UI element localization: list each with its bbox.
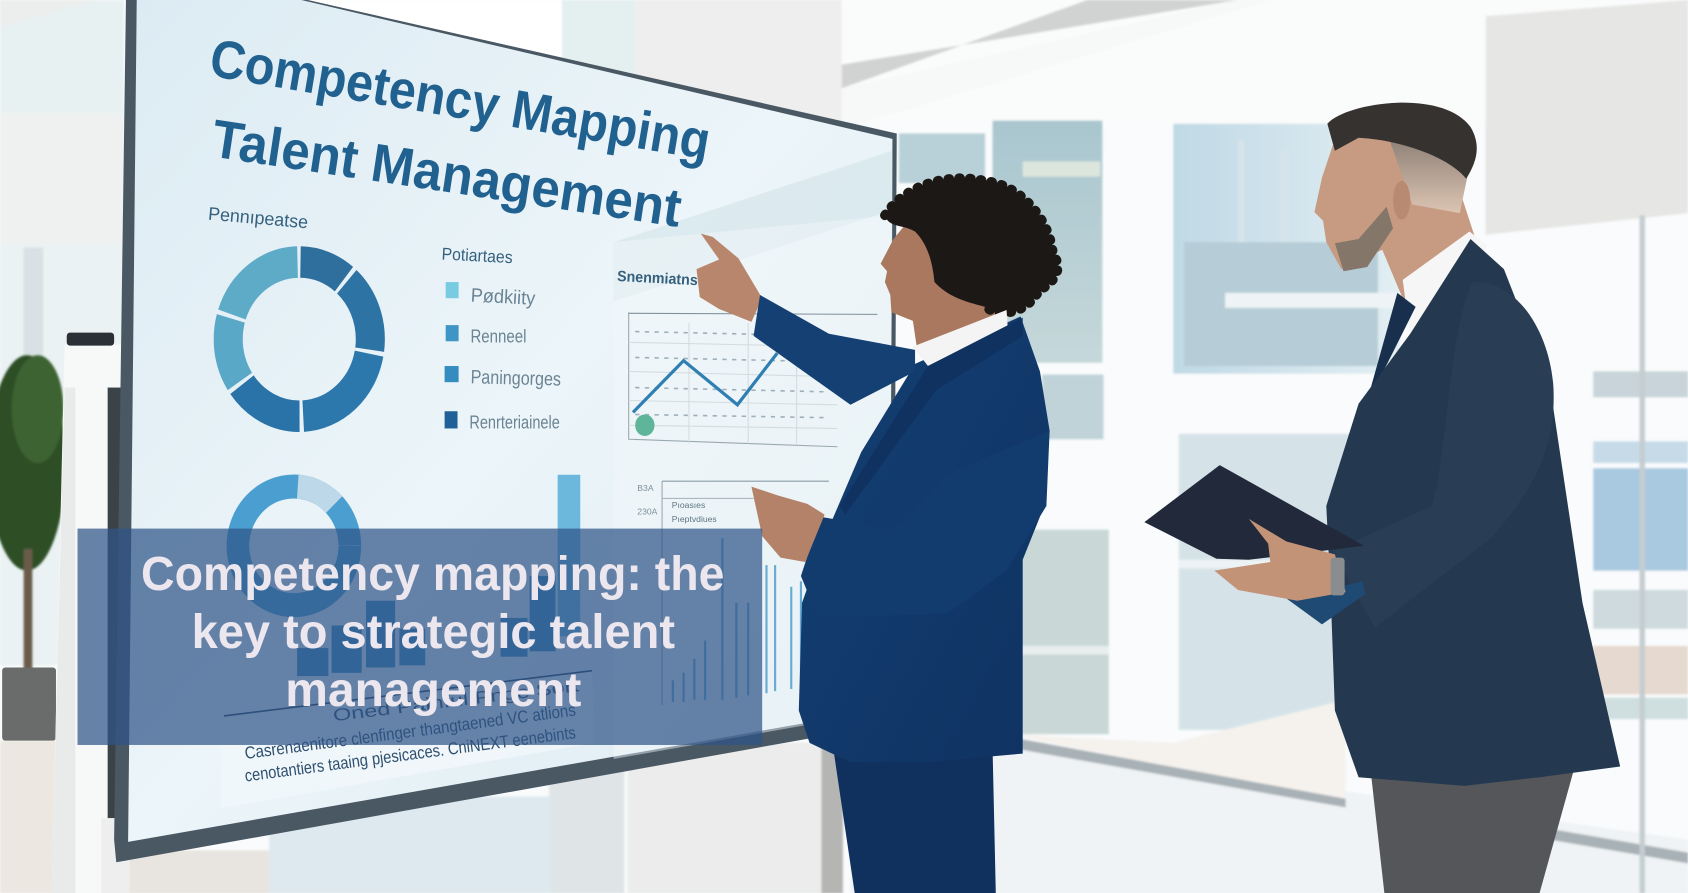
notes card: Oned Painful Pnge Sort (332, 675, 580, 725)
potted plant (0, 355, 66, 741)
screen title: Talent Management (208, 109, 686, 239)
face and neck (881, 215, 1007, 350)
jacket body (1326, 239, 1620, 786)
beard (1335, 207, 1393, 271)
notes card (221, 670, 594, 808)
man holding a folder (1144, 103, 1620, 893)
banner text: management (285, 663, 581, 717)
line chart: Snenmiatns (617, 268, 698, 289)
donut chart heading: Pennıpeatse (207, 203, 309, 232)
banner text: Competency mapping: the (141, 547, 725, 601)
hair fade (1389, 138, 1471, 213)
legend (441, 243, 561, 432)
legend: Paningorges (470, 366, 561, 391)
sleeve (1333, 282, 1554, 628)
lower sleeve (801, 431, 1050, 618)
bottom right chart: 230A (637, 507, 658, 517)
bar chart (297, 475, 580, 676)
man pointing at the screen (697, 178, 1058, 893)
trousers (1369, 759, 1574, 893)
hair (885, 178, 1058, 313)
hand (1214, 519, 1346, 601)
hair (1327, 103, 1477, 179)
display stand (52, 333, 129, 893)
screen frame (114, 0, 897, 862)
ear (1393, 181, 1410, 220)
line chart (617, 268, 877, 447)
legend: Potiartaes (441, 243, 513, 267)
jacket body (799, 317, 1050, 762)
folder (1144, 465, 1364, 560)
neck and head (1314, 127, 1475, 304)
raised sleeve (754, 295, 915, 405)
pointing hand (697, 234, 762, 322)
lower hand (751, 487, 825, 562)
bottom right chart: B3A (637, 483, 654, 493)
title banner (78, 529, 762, 745)
watch (1331, 558, 1345, 595)
shirt collar (913, 310, 1008, 366)
screen surface (128, 0, 892, 842)
screen title: Competency Mapping (206, 28, 715, 172)
banner background (78, 529, 762, 745)
lapel (840, 318, 1023, 515)
donut chart (228, 262, 370, 416)
presentation screen (114, 0, 897, 862)
notes card: cenotantiers taaing pjesicaces. CniNEXT eenebints (243, 722, 577, 786)
legend: Pødkiity (470, 284, 536, 310)
bottom right chart: Pıoasıes (672, 500, 705, 510)
screen title (206, 28, 715, 239)
notes card: Casrenaenitore clenfinger thangtaened VC atlions (243, 700, 577, 763)
bottom right chart: Pıeptvdiues (672, 514, 717, 524)
trousers (833, 748, 996, 893)
shirt collar (1403, 231, 1488, 336)
tie (1369, 293, 1416, 393)
banner text (141, 547, 725, 717)
glare bands (614, 151, 892, 301)
second donut chart (238, 486, 350, 605)
legend: Renrteriainele (469, 411, 560, 432)
bottom right chart (637, 481, 829, 705)
banner text: key to strategic talent (192, 605, 675, 659)
legend: Renneel (470, 325, 526, 346)
